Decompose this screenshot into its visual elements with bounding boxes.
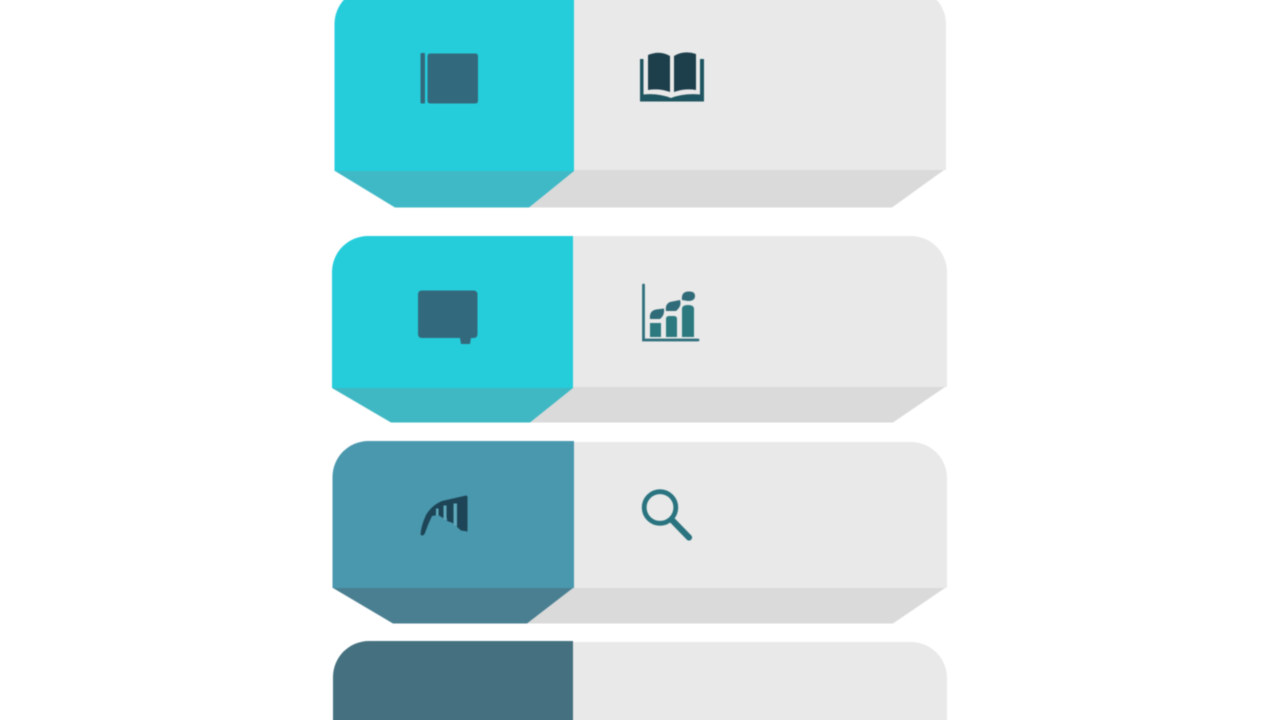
icon: closed notebook [420,53,478,104]
icon: speech bubble [418,290,478,344]
row 4 grey face [573,642,947,720]
light gaps between bars [436,504,457,526]
row 2 grey face [573,236,947,387]
row 1 cyan face [334,0,574,171]
row 4 dark teal face [333,641,573,720]
icon: open book [640,52,704,102]
icon: bar chart [644,285,698,340]
row 2 grey bottom bevel [530,387,945,422]
panel: row 3 [332,441,947,624]
row 2 cyan face [332,236,573,388]
row 3 grey face [574,442,947,588]
panel: row 1 [334,0,946,208]
icon: magnifying glass [644,492,689,538]
row 1 grey bottom bevel [529,170,944,208]
panel: row 2 [332,236,947,422]
row 3 teal bottom bevel [333,588,573,624]
row 2 cyan bottom bevel [332,388,573,422]
panel: row 4 [333,641,947,720]
row 3 grey bottom bevel [527,588,945,624]
row 3 teal face [332,441,574,588]
icon: rising curve with bars [420,496,468,535]
row 1 grey face [574,0,946,170]
row 1 cyan bottom bevel [335,171,574,208]
